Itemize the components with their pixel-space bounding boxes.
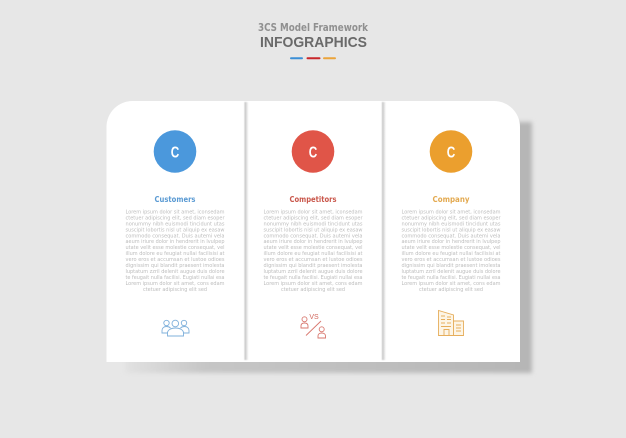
body text: dignissim qui blandit praesent imolesta [126, 263, 224, 269]
body text: luptatum zzril delenit augue duis dolore [402, 269, 500, 275]
body text: aeum iriure dolor in hendrerit in lvulpep [264, 239, 362, 245]
column separator 1 [244, 102, 248, 360]
panel shadow [125, 122, 532, 373]
body text [402, 210, 501, 293]
panel: company [402, 130, 501, 336]
body text: Lorem ipsum dolor sit amet, cons edam [402, 281, 501, 287]
body text: ctetuer adipiscing elit, sed diam esoper [402, 215, 501, 221]
body text: utate velit esse molestie consequat, vel [402, 245, 500, 251]
white panel base [106, 101, 520, 362]
body text: Lorem ipsum dolor sit amet, iconsedam [264, 210, 363, 216]
body text: nonummy nibh euismodi tincidunt utas [402, 221, 501, 227]
heading: customers: Customers [154, 195, 196, 204]
icon: office building [438, 310, 464, 336]
body text [264, 210, 363, 293]
body text: commodo consequat. Duis autemi vela [264, 233, 362, 239]
body text: commodo consequat. Duis autemi vela [402, 233, 500, 239]
icon: people group [162, 320, 189, 336]
accent bars [290, 57, 336, 59]
icon: versus people: VS [309, 314, 319, 321]
body text: nonummy nibh euismodi tincidunt utas [264, 221, 363, 227]
body text: ctetuer adipiscing elit sed [281, 287, 345, 293]
body text: ctetuer adipiscing elit, sed diam esoper [264, 215, 363, 221]
icon: C circle: C [447, 144, 456, 161]
body text: suscipit lobortis nisl ut aliquip ex easaw [402, 227, 500, 233]
body text: vero eros et accumsan et lustoe odioes [264, 257, 363, 263]
panel: customers [126, 130, 225, 336]
body text: ctetuer adipiscing elit, sed diam esoper [126, 215, 225, 221]
body text: vero eros et accumsan et lustoe odioes [126, 257, 225, 263]
body text: illum dolore eu feugiat nullai facilisisi at [402, 251, 501, 257]
heading: competitors: Competitors [290, 195, 337, 204]
body text: utate velit esse molestie consequat, vel [126, 245, 224, 251]
body text: suscipit lobortis nisl ut aliquip ex easaw [126, 227, 224, 233]
panel: competitors [264, 130, 363, 338]
body text: ctetuer adipiscing elit sed [419, 287, 483, 293]
body text: commodo consequat. Duis autemi vela [126, 233, 224, 239]
body text: dignissim qui blandit praesent imolesta [264, 263, 362, 269]
icon: C circle [430, 130, 472, 173]
body text: te feugait nulla facilisi. Eugiati nullai esa [126, 275, 224, 281]
icon: C circle [292, 130, 334, 173]
body text: Lorem ipsum dolor sit amet, iconsedam [126, 210, 225, 216]
heading: company: Company [432, 195, 470, 204]
icon: C circle: C [171, 144, 180, 161]
body text: illum dolore eu feugiat nullai facilisisi at [264, 251, 363, 257]
body text [126, 210, 225, 293]
body text: aeum iriure dolor in hendrerit in lvulpep [402, 239, 500, 245]
heading: INFOGRAPHICS [260, 34, 367, 51]
body text: ctetuer adipiscing elit sed [143, 287, 207, 293]
body text: dignissim qui blandit praesent imolesta [402, 263, 500, 269]
body text: utate velit esse molestie consequat, vel [264, 245, 362, 251]
body text: Lorem ipsum dolor sit amet, cons edam [264, 281, 363, 287]
body text: suscipit lobortis nisl ut aliquip ex easaw [264, 227, 362, 233]
body text: illum dolore eu feugiat nullai facilisisi at [126, 251, 225, 257]
body text: nonummy nibh euismodi tincidunt utas [126, 221, 225, 227]
icon: C circle [154, 130, 196, 173]
body text: te feugait nulla facilisi. Eugiati nullai esa [402, 275, 500, 281]
icon: C circle: C [309, 144, 318, 161]
body text: luptatum zzril delenit augue duis dolore [264, 269, 362, 275]
body text: Lorem ipsum dolor sit amet, iconsedam [402, 210, 501, 216]
body text: aeum iriure dolor in hendrerit in lvulpep [126, 239, 224, 245]
icon: versus people [301, 314, 326, 338]
body text: vero eros et accumsan et lustoe odioes [402, 257, 501, 263]
body text: te feugait nulla facilisi. Eugiati nullai esa [264, 275, 362, 281]
subtitle: 3CS Model Framework [258, 22, 369, 34]
column separator 2 [382, 102, 386, 360]
body text: Lorem ipsum dolor sit amet, cons edam [126, 281, 225, 287]
title [258, 22, 369, 59]
body text: luptatum zzril delenit augue duis dolore [126, 269, 224, 275]
